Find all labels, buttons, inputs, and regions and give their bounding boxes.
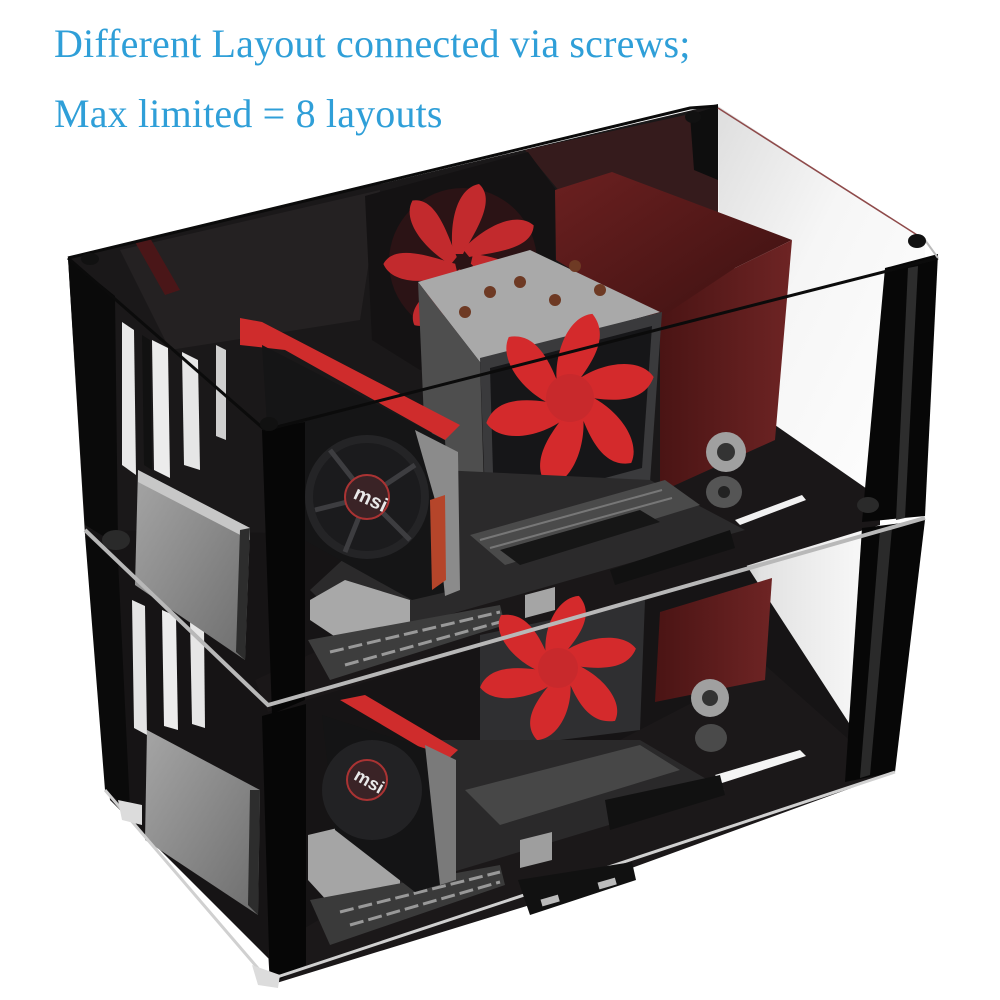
CPU cooler, upper tier [418, 250, 662, 522]
acrylic feet [118, 800, 280, 988]
upper shelf plate [255, 425, 880, 712]
back panel, upper tier [68, 104, 718, 560]
hard drive, lower tier [145, 730, 260, 915]
shelf screws [102, 497, 879, 550]
divider between tiers [85, 518, 925, 705]
smoked reflection on back panel [120, 190, 380, 350]
front left pillar, lower tier [262, 704, 306, 985]
hard drive, upper tier [135, 470, 250, 660]
lower tier power supply [655, 578, 772, 752]
left side slots lower [85, 535, 205, 810]
back panel, lower tier [85, 530, 860, 960]
white cutout in upper plate [735, 495, 806, 525]
right pillar, upper tier [862, 254, 938, 522]
msi logo: msi [351, 765, 388, 798]
red streak on back panel [135, 238, 180, 295]
front USB panel [518, 862, 636, 915]
motherboard, upper tier [308, 470, 745, 680]
heading line 1: Different Layout connected via screws; [54, 21, 691, 66]
bottom edge of lower tier [105, 772, 895, 980]
back corner pillar [690, 106, 718, 180]
top screws [81, 111, 926, 431]
heading line 2: Max limited = 8 layouts [54, 91, 443, 136]
right glass side, upper tier [718, 106, 925, 525]
reddish reflection on back panel [525, 108, 718, 300]
right pillar, lower tier [845, 520, 925, 782]
msi logo: msi [350, 482, 391, 517]
top glass panel edges [68, 106, 938, 430]
lower tier CPU fan [477, 596, 645, 750]
graphics card, upper tier [240, 318, 460, 600]
right glass side, lower tier [700, 520, 875, 750]
graphics card, lower tier [322, 695, 458, 892]
rear fan, upper tier [365, 152, 556, 370]
lower tier plate [268, 665, 895, 985]
power supply, upper tier [555, 172, 792, 508]
front left pillar, upper tier [262, 422, 305, 714]
left side slots upper [68, 258, 226, 545]
white cutout in lower plate [715, 750, 806, 783]
motherboard, lower tier [308, 740, 725, 945]
